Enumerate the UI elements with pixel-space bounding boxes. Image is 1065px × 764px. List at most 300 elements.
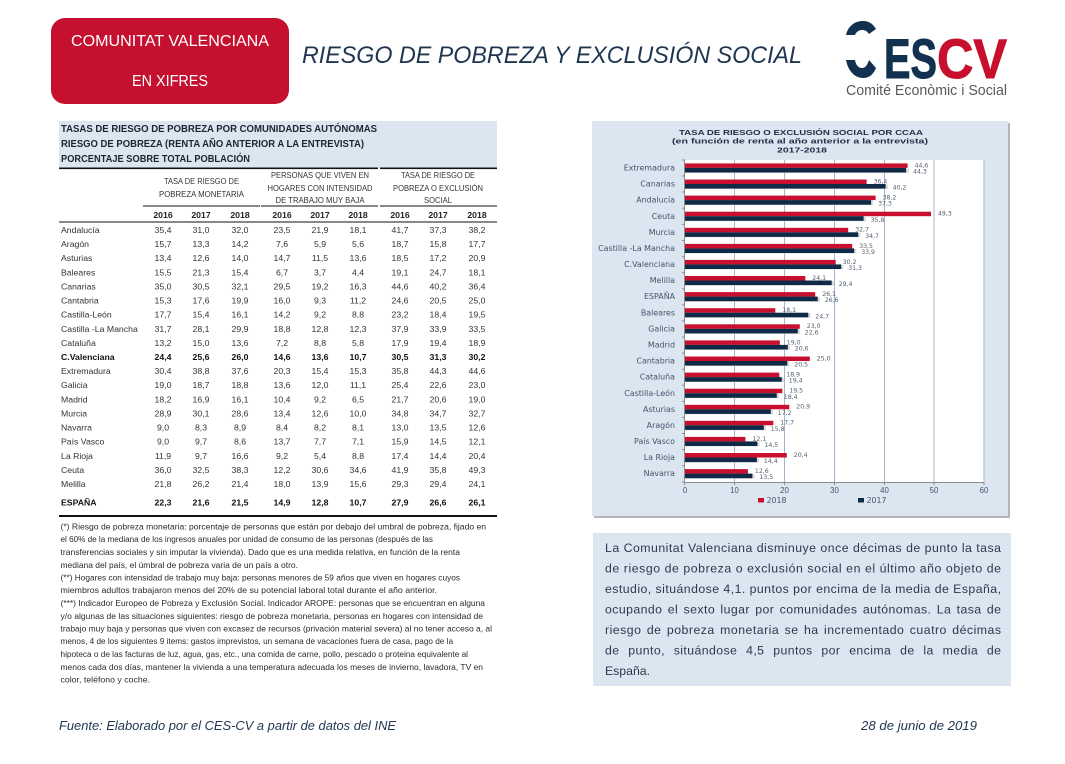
bar row: Canarias: 40,2 bbox=[893, 185, 906, 192]
column group: personas en hogares con intensidad de trabajo muy baja: HOGARES CON INTENSIDAD bbox=[268, 184, 373, 193]
table row: Galicia: Galicia bbox=[61, 380, 88, 390]
table row: Asturias: 14,7 bbox=[274, 253, 291, 263]
year headers: 2016 bbox=[153, 210, 173, 220]
table row: Castilla-León: 18,4 bbox=[430, 310, 447, 320]
footnotes: mediana del país, el úmbral de pobreza varia de un país a otro. bbox=[60, 560, 298, 570]
bar row: Ceuta: 49,3 bbox=[938, 211, 952, 218]
bar row: Cataluña bbox=[640, 372, 803, 385]
table row: Canarias: 36,4 bbox=[469, 281, 486, 291]
table row: Canarias: 44,6 bbox=[392, 281, 409, 291]
bar row: Madrid: 19,0 bbox=[787, 339, 801, 346]
table row: Navarra: 13,0 bbox=[392, 422, 409, 432]
header badge: Comunitat Valenciana en xifres bbox=[51, 18, 289, 104]
bar row: Murcia bbox=[649, 227, 879, 240]
table row: Murcia: 30,1 bbox=[193, 408, 210, 418]
x axis labels: 50 bbox=[930, 486, 939, 495]
table row: Madrid: 10,4 bbox=[274, 394, 291, 404]
table row: Extremadura: 38,8 bbox=[193, 366, 210, 376]
table row: Madrid: 16,1 bbox=[232, 394, 249, 404]
bar row: Melilla: 29,4 bbox=[839, 281, 853, 288]
column group: personas en hogares con intensidad de trabajo muy baja: DE TRABAJO MUY BAJA bbox=[276, 196, 365, 205]
bar row: Galicia: Galicia bbox=[648, 324, 675, 333]
table row: Andalucía: 38,2 bbox=[469, 225, 486, 235]
table row: Murcia: 12,6 bbox=[312, 408, 329, 418]
bar row: Aragón bbox=[647, 420, 794, 433]
table row: Castilla-León: 9,2 bbox=[314, 310, 326, 320]
bar row: Castilla-La Mancha: Castilla -La Mancha bbox=[598, 244, 675, 253]
bar row: Melilla: 24,1 bbox=[812, 275, 826, 282]
bar row: España bbox=[644, 291, 839, 304]
table row: Canarias: 29,5 bbox=[274, 281, 291, 291]
table row: C.Valenciana (highlighted): 26,0 bbox=[232, 352, 249, 362]
table row: Extremadura: 37,6 bbox=[232, 366, 249, 376]
bar row: C.Valenciana bbox=[624, 259, 862, 272]
bar row: Cataluña: 19,4 bbox=[789, 378, 803, 385]
footnotes: y/o algunas de las situaciones siguientes: riesgo de pobreza monetaria, personas en hogares con intensidad de bbox=[60, 611, 483, 621]
table row: Galicia: 11,1 bbox=[350, 380, 366, 390]
legend bbox=[758, 496, 886, 505]
header badge: Comunitat Valenciana en xifres: EN XIFRES bbox=[132, 73, 208, 90]
year headers: 2016 bbox=[390, 210, 410, 220]
bar row: Galicia bbox=[648, 323, 821, 336]
table row: Murcia: 28,6 bbox=[232, 408, 249, 418]
table row: Andalucía: Andalucía bbox=[61, 225, 100, 235]
bar row: Cantabria: 20,5 bbox=[794, 362, 808, 369]
bar row: Baleares: Baleares bbox=[641, 308, 675, 317]
commentary text box: de riesgo de pobreza o exclusión social en el último año objeto de bbox=[605, 562, 1001, 576]
x axis labels: 10 bbox=[730, 486, 739, 495]
table row: Cantabria: 25,0 bbox=[469, 296, 486, 306]
legend: 2018 bbox=[767, 496, 786, 505]
bar row: Aragón: Aragón bbox=[647, 420, 675, 430]
footnotes bbox=[60, 522, 492, 684]
table row: Andalucía: 31,0 bbox=[193, 225, 210, 235]
bar row: Murcia: 34,7 bbox=[865, 233, 879, 240]
column group: tasa de riesgo de pobreza monetaria bbox=[143, 177, 260, 206]
table row: La Rioja: 17,4 bbox=[392, 451, 409, 461]
logo: CES-CV: Comité Econòmic i Social bbox=[846, 82, 1007, 99]
table row: Canarias: Canarias bbox=[61, 281, 96, 291]
bar row: Castilla-La Mancha: 33,9 bbox=[861, 249, 875, 256]
table row: Madrid bbox=[61, 394, 486, 404]
bar row: La Rioja: 14,4 bbox=[764, 458, 778, 465]
footnotes: color, teléfono y coche. bbox=[60, 674, 150, 684]
bar row: Castilla-León bbox=[624, 388, 803, 401]
table row: Ceuta: 41,9 bbox=[392, 465, 409, 475]
commentary text box: riesgo de pobreza monetaria se ha incrementado cuatro décimas bbox=[605, 623, 1001, 637]
table row: Aragón: Aragón bbox=[61, 239, 89, 249]
table row: Melilla: 29,3 bbox=[392, 479, 409, 489]
table row: La Rioja bbox=[61, 451, 486, 461]
bar row: Baleares: 18,1 bbox=[782, 307, 796, 314]
table row: Extremadura: 20,3 bbox=[274, 366, 291, 376]
bar row: La Rioja bbox=[644, 452, 808, 465]
chart panel: tasa de riesgo o exclusión social por CCAA bbox=[592, 121, 1010, 518]
bar row: Cantabria bbox=[636, 355, 831, 369]
year headers: 2016 bbox=[272, 210, 292, 220]
table row: País Vasco: 9,0 bbox=[157, 437, 169, 447]
bar row: Canarias: Canarias bbox=[640, 180, 675, 189]
table row: Cataluña: 15,0 bbox=[193, 338, 210, 348]
table row: Cantabria: 16,0 bbox=[274, 296, 291, 306]
table row: Castilla-León bbox=[61, 310, 486, 320]
footnotes: (*) Riesgo de pobreza monetaria: porcentaje de personas que están por debajo del umbral de pobreza, fijado en bbox=[60, 522, 486, 532]
table row: Andalucía: 23,5 bbox=[274, 225, 291, 235]
bar row: Navarra bbox=[644, 468, 773, 481]
year headers bbox=[153, 210, 487, 220]
table row: Baleares: 15,5 bbox=[155, 267, 172, 277]
table row: C.Valenciana (highlighted): 30,5 bbox=[392, 352, 409, 362]
table row: C.Valenciana (highlighted): 24,4 bbox=[155, 352, 172, 362]
bar row: Asturias: 17,2 bbox=[778, 410, 792, 417]
logo: CES-CV: CV bbox=[937, 27, 1007, 90]
commentary text box: ocupando el sexto lugar por comunidades autónomas. La tasa de bbox=[605, 602, 1001, 616]
table row: C.Valenciana (highlighted): 30,2 bbox=[469, 352, 486, 362]
table heading bbox=[59, 121, 497, 168]
table row: La Rioja: 20,4 bbox=[469, 451, 486, 461]
table row: C.Valenciana (highlighted) bbox=[61, 352, 486, 362]
x axis labels: 40 bbox=[880, 486, 889, 495]
bar row: Asturias: Asturias bbox=[643, 405, 675, 414]
footnotes: miembros adultos trabajaron menos del 20% de su potencial laboral total durante el año anterior. bbox=[60, 585, 437, 595]
table row: C.Valenciana (highlighted): 14,6 bbox=[274, 352, 291, 362]
table row: País Vasco: 12,1 bbox=[469, 437, 486, 447]
table row: Ceuta: 12,2 bbox=[274, 465, 291, 475]
footnotes: transferencias sociales y sin imputar la vivienda). Dado que es una medida relativa, en función de la renta bbox=[60, 547, 460, 557]
table row: Extremadura: 35,8 bbox=[392, 366, 409, 376]
table row: Aragón: 15,8 bbox=[430, 239, 447, 249]
table row: Canarias: 30,5 bbox=[193, 281, 210, 291]
bar row: Castilla-León: 19,5 bbox=[789, 388, 803, 395]
bar row: Murcia: Murcia bbox=[649, 228, 675, 237]
table row: C.Valenciana (highlighted): 31,3 bbox=[430, 352, 447, 362]
column group: personas en hogares con intensidad de trabajo muy baja: PERSONAS QUE VIVEN EN bbox=[271, 171, 369, 180]
table row: Castilla-León: Castilla-León bbox=[61, 310, 112, 320]
table row: España total: 26,1 bbox=[469, 498, 486, 508]
legend: 2017 bbox=[867, 496, 886, 505]
table row: Castilla-León: 17,7 bbox=[155, 310, 172, 320]
table row: España total: 26,6 bbox=[430, 498, 447, 508]
table row: Asturias: 11,5 bbox=[312, 253, 328, 263]
year headers: 2018 bbox=[348, 210, 368, 220]
table row: Andalucía: 35,4 bbox=[155, 225, 172, 235]
column group: personas en hogares con intensidad de trabajo muy baja bbox=[261, 171, 378, 206]
table row: Cataluña: 13,2 bbox=[155, 338, 172, 348]
table row: Cataluña: 7,2 bbox=[276, 338, 288, 348]
table row: Castilla-León: 15,4 bbox=[193, 310, 210, 320]
bar row: Baleares bbox=[641, 307, 829, 320]
table row: Melilla: 21,4 bbox=[232, 479, 249, 489]
bar row: Melilla: Melilla bbox=[650, 276, 675, 285]
table row: Aragón: 5,9 bbox=[314, 239, 326, 249]
bar row: Castilla-La Mancha: 33,5 bbox=[859, 243, 873, 250]
table row: Extremadura: 44,6 bbox=[469, 366, 486, 376]
table row: Canarias: 16,3 bbox=[350, 281, 367, 291]
bar row: Castilla-León: Castilla-León bbox=[624, 388, 675, 398]
table row: Extremadura: 30,4 bbox=[155, 366, 172, 376]
table row: Asturias: 13,4 bbox=[155, 253, 172, 263]
table heading: RIESGO DE POBREZA (RENTA AÑO ANTERIOR A LA ENTREVISTA) bbox=[61, 137, 364, 150]
table row: País Vasco: 7,1 bbox=[352, 437, 364, 447]
table row: C.Valenciana (highlighted): 10,7 bbox=[350, 352, 367, 362]
table row: Canarias: 35,0 bbox=[155, 281, 172, 291]
bar row: C.Valenciana: 30,2 bbox=[843, 259, 857, 266]
table row: Madrid: 16,9 bbox=[193, 394, 210, 404]
table row: Ceuta: 49,3 bbox=[469, 465, 486, 475]
table row: Aragón: 5,6 bbox=[352, 239, 364, 249]
table row: Aragón: 15,7 bbox=[155, 239, 172, 249]
bar row: Cantabria: Cantabria bbox=[636, 357, 675, 366]
table row: Extremadura: 15,3 bbox=[350, 366, 367, 376]
table row: Castilla-La Mancha: 18,8 bbox=[274, 324, 291, 334]
table row: País Vasco: País Vasco bbox=[61, 437, 104, 447]
year headers: 2017 bbox=[310, 210, 330, 220]
table row: Castilla-La Mancha: 33,9 bbox=[430, 324, 447, 334]
bar row: Ceuta: Ceuta bbox=[652, 212, 675, 221]
table row: País Vasco: 7,7 bbox=[314, 437, 326, 447]
column group: tasa de riesgo de pobreza o exclusión social: TASA DE RIESGO DE bbox=[401, 171, 475, 180]
table row: Madrid: 18,2 bbox=[155, 394, 172, 404]
chart title: TASA DE RIESGO O EXCLUSIÓN SOCIAL POR CCAA bbox=[679, 128, 924, 137]
table row: Extremadura: Extremadura bbox=[61, 366, 111, 376]
table row: Murcia: 32,7 bbox=[469, 408, 486, 418]
footnotes: (***) Indicador Europeo de Pobreza y Exclusión Social. Indicador AROPE: personas que se encuentran en alguna bbox=[60, 598, 485, 608]
bar row: Asturias bbox=[643, 404, 810, 417]
table row: Ceuta: 34,6 bbox=[350, 465, 367, 475]
bar row: Extremadura: Extremadura bbox=[624, 164, 675, 172]
table row: España total bbox=[61, 498, 486, 508]
table row: Murcia: 34,7 bbox=[430, 408, 447, 418]
table row: Cantabria: 11,2 bbox=[350, 296, 366, 306]
table row: Castilla-La Mancha: 33,5 bbox=[469, 324, 486, 334]
bar row: Galicia: 22,6 bbox=[805, 329, 819, 336]
bar row: España: 26,1 bbox=[822, 291, 836, 298]
table row: Galicia: 23,0 bbox=[469, 380, 486, 390]
table row: Cataluña bbox=[61, 338, 486, 348]
table row: C.Valenciana (highlighted): C.Valenciana bbox=[61, 352, 115, 362]
bar row: Navarra: 13,5 bbox=[759, 474, 773, 481]
table row: Asturias: Asturias bbox=[61, 253, 93, 263]
bar row: Murcia: 32,7 bbox=[855, 227, 869, 234]
table row: C.Valenciana (highlighted): 25,6 bbox=[193, 352, 210, 362]
table row: Andalucía: 18,1 bbox=[350, 225, 367, 235]
table row: Navarra: 13,5 bbox=[430, 422, 447, 432]
table row: Baleares: 18,1 bbox=[469, 267, 486, 277]
bar row: Castilla-León: 18,4 bbox=[784, 394, 798, 401]
table row: Ceuta: 32,5 bbox=[193, 465, 210, 475]
bar row: Cantabria: 25,0 bbox=[817, 355, 831, 362]
bar row: Melilla bbox=[650, 275, 853, 288]
table row: Baleares: Baleares bbox=[61, 267, 96, 277]
table row: Baleares bbox=[61, 267, 486, 277]
bar row: Cataluña: Cataluña bbox=[640, 373, 675, 382]
table row: España total: 14,9 bbox=[274, 498, 291, 508]
table row: España total: 21,6 bbox=[193, 498, 210, 508]
column group: tasa de riesgo de pobreza monetaria: TASA DE RIESGO DE bbox=[164, 177, 239, 186]
bar row: Madrid: 20,6 bbox=[795, 346, 809, 352]
table row: Baleares: 21,3 bbox=[193, 267, 210, 277]
table row: España total: 22,3 bbox=[155, 498, 172, 508]
bar row: Canarias: 36,4 bbox=[874, 178, 887, 185]
table row: Cantabria: Cantabria bbox=[61, 296, 99, 306]
footnotes: el 60% de la mediana de los ingresos anuales por unidad de consumo de las personas (después de las bbox=[60, 534, 433, 544]
table row: España total: 12,8 bbox=[312, 498, 329, 508]
table row: Aragón: 14,2 bbox=[232, 239, 249, 249]
table row: La Rioja: 9,2 bbox=[276, 451, 288, 461]
table row: Andalucía bbox=[61, 225, 486, 235]
footnotes: hipoteca o de las facturas de luz, agua, gas, etc., una comida de carne, pollo, pescado o proteina equivalente al bbox=[60, 649, 468, 659]
footnotes: trabajo muy baja y personas que viven con excasez de recursos (privación material severa) al no tener acceso a, al bbox=[60, 624, 492, 634]
table row: Extremadura: 15,4 bbox=[312, 366, 329, 376]
table row: Cantabria: 15,3 bbox=[155, 296, 172, 306]
table row: Canarias: 32,1 bbox=[232, 281, 249, 291]
table row: La Rioja: 16,6 bbox=[232, 451, 249, 461]
table row: Aragón: 18,7 bbox=[392, 239, 409, 249]
table row: Melilla: 26,2 bbox=[193, 479, 210, 489]
bar row: País Vasco: 14,5 bbox=[764, 442, 778, 449]
table row: Cantabria: 19,9 bbox=[232, 296, 249, 306]
table row: Baleares: 15,4 bbox=[232, 267, 249, 277]
table row: Murcia bbox=[61, 408, 486, 418]
table row: País Vasco: 8,6 bbox=[234, 437, 246, 447]
table row: Ceuta: 35,8 bbox=[430, 465, 447, 475]
commentary text box: España. bbox=[605, 664, 650, 678]
source note: Fuente: Elaborado por el CES-CV a partir de datos del INE bbox=[59, 719, 397, 733]
table row: Cantabria bbox=[61, 296, 486, 306]
table row: Madrid: 9,2 bbox=[314, 394, 326, 404]
table row: Castilla-La Mancha: Castilla -La Mancha bbox=[61, 324, 138, 334]
table row: Cantabria: 20,5 bbox=[430, 296, 447, 306]
bar row: Navarra: 12,6 bbox=[755, 468, 769, 475]
table row: Asturias: 12,6 bbox=[193, 253, 210, 263]
table row: Navarra: 8,3 bbox=[195, 422, 207, 432]
table row: Melilla: 18,0 bbox=[274, 479, 291, 489]
table row: Navarra: Navarra bbox=[61, 422, 92, 432]
x axis labels: 30 bbox=[830, 486, 839, 495]
bar row: Andalucía: Andalucía bbox=[636, 196, 675, 205]
table row: Navarra bbox=[61, 422, 486, 432]
header badge: Comunitat Valenciana en xifres: COMUNITAT VALENCIANA bbox=[71, 33, 269, 50]
table row: Melilla: 29,4 bbox=[430, 479, 447, 489]
table row: Castilla-La Mancha bbox=[61, 324, 486, 334]
title: RIESGO DE POBREZA Y EXCLUSIÓN SOCIAL bbox=[302, 42, 802, 69]
table row: Castilla-León: 23,2 bbox=[392, 310, 409, 320]
table row: País Vasco: 13,7 bbox=[274, 437, 291, 447]
table row: Galicia: 22,6 bbox=[430, 380, 447, 390]
bar row: Navarra: Navarra bbox=[644, 469, 675, 478]
table row: Andalucía: 21,9 bbox=[312, 225, 329, 235]
bar row: Ceuta bbox=[652, 211, 952, 224]
bar row: Extremadura: 44,6 bbox=[915, 162, 928, 169]
bar row: C.Valenciana: 31,3 bbox=[848, 265, 862, 272]
bar row: Aragón: 15,8 bbox=[771, 426, 785, 433]
table row: Castilla-La Mancha: 31,7 bbox=[155, 324, 172, 334]
table row: Extremadura: 44,3 bbox=[430, 366, 447, 376]
year headers: 2017 bbox=[191, 210, 211, 220]
table row: La Rioja: 14,4 bbox=[430, 451, 447, 461]
table row: Murcia: Murcia bbox=[61, 408, 87, 418]
footnotes: (**) Hogares con intensidad de trabajo muy baja: personas menores de 59 años que viven en hogares cuyos bbox=[60, 572, 460, 582]
bar row: España: ESPAÑA bbox=[644, 291, 676, 301]
table row: Castilla-León: 19,5 bbox=[469, 310, 486, 320]
column group: tasa de riesgo de pobreza o exclusión social bbox=[380, 171, 497, 206]
table row: Madrid: Madrid bbox=[61, 394, 88, 404]
table row: Canarias: 40,2 bbox=[430, 281, 447, 291]
table row: Madrid: 21,7 bbox=[392, 394, 409, 404]
column group: tasa de riesgo de pobreza monetaria: POBREZA MONETARIA bbox=[159, 190, 245, 199]
table row: Asturias: 20,9 bbox=[469, 253, 486, 263]
bar row: Andalucía: 37,3 bbox=[878, 201, 892, 208]
table row: País Vasco: 14,5 bbox=[430, 437, 447, 447]
bar row: Extremadura: 44,3 bbox=[913, 168, 927, 176]
table row: Galicia: 12,0 bbox=[312, 380, 329, 390]
commentary text box: de punto, situándose 4,5 puntos por encima de la media de bbox=[605, 644, 1001, 658]
table row: Castilla-La Mancha: 12,3 bbox=[350, 324, 367, 334]
footnotes: menos cada dos días, mantener la vivienda a una temperatura adecuada los meses de invierno, lavadora, TV en bbox=[60, 662, 483, 672]
table row: Melilla: 24,1 bbox=[469, 479, 486, 489]
table row: Baleares: 19,1 bbox=[392, 267, 409, 277]
table row: Ceuta: Ceuta bbox=[61, 465, 84, 475]
table row: Baleares: 24,7 bbox=[430, 267, 447, 277]
bar row: País Vasco: País Vasco bbox=[634, 437, 675, 446]
table row: Baleares: 4,4 bbox=[352, 267, 364, 277]
table row: Galicia: 13,6 bbox=[274, 380, 291, 390]
x axis labels: 60 bbox=[980, 486, 989, 495]
table row: País Vasco: 15,9 bbox=[392, 437, 409, 447]
table row: Asturias: 14,0 bbox=[232, 253, 249, 263]
table row: Castilla-La Mancha: 29,9 bbox=[232, 324, 249, 334]
bar row: Ceuta: 35,8 bbox=[871, 217, 884, 224]
table row: Castilla-León: 14,2 bbox=[274, 310, 291, 320]
table row: Aragón: 13,3 bbox=[193, 239, 210, 249]
table row: Galicia: 25,4 bbox=[392, 380, 409, 390]
bar row: C.Valenciana: C.Valenciana bbox=[624, 260, 675, 269]
table row: Murcia: 13,4 bbox=[274, 408, 291, 418]
column group: tasa de riesgo de pobreza o exclusión social: POBREZA O EXCLUSIÓN bbox=[393, 183, 483, 193]
table row: C.Valenciana (highlighted): 13,6 bbox=[312, 352, 329, 362]
bar row: Madrid bbox=[648, 339, 809, 352]
bar row: País Vasco: 12,1 bbox=[752, 436, 766, 443]
bar row: Castilla-La Mancha bbox=[598, 243, 875, 256]
table row: Galicia: 19,0 bbox=[155, 380, 172, 390]
table row: Asturias: 18,5 bbox=[392, 253, 409, 263]
table row: Galicia: 18,7 bbox=[193, 380, 210, 390]
bar row: Asturias: 20,9 bbox=[796, 404, 810, 411]
table row: País Vasco: 9,7 bbox=[195, 437, 207, 447]
table row: Navarra: 9,0 bbox=[157, 422, 169, 432]
x axis labels: 0 bbox=[683, 486, 688, 495]
chart title: (en función de renta al año anterior a la entrevista) bbox=[672, 136, 929, 146]
table row: Asturias: 17,2 bbox=[430, 253, 447, 263]
table row: Baleares: 6,7 bbox=[276, 267, 288, 277]
table row: Melilla: 15,6 bbox=[350, 479, 367, 489]
bar row: Baleares: 24,7 bbox=[815, 313, 829, 320]
table row: Galicia: 18,8 bbox=[232, 380, 249, 390]
table row: Aragón: 7,6 bbox=[276, 239, 288, 249]
x axis labels bbox=[683, 486, 989, 495]
table row: Ceuta: 30,6 bbox=[312, 465, 329, 475]
table row: Castilla-La Mancha: 28,1 bbox=[193, 324, 210, 334]
table row: España total: 27,9 bbox=[392, 498, 409, 508]
table row: Canarias: 19,2 bbox=[312, 281, 329, 291]
table row: Cataluña: Cataluña bbox=[61, 338, 96, 348]
bar row: País Vasco bbox=[634, 436, 778, 449]
table row: Cataluña: 17,9 bbox=[392, 338, 409, 348]
bar row: Madrid: Madrid bbox=[648, 340, 675, 350]
table row: Canarias bbox=[61, 281, 486, 291]
table row: Navarra: 8,2 bbox=[314, 422, 326, 432]
table row: Ceuta: 38,3 bbox=[232, 465, 249, 475]
